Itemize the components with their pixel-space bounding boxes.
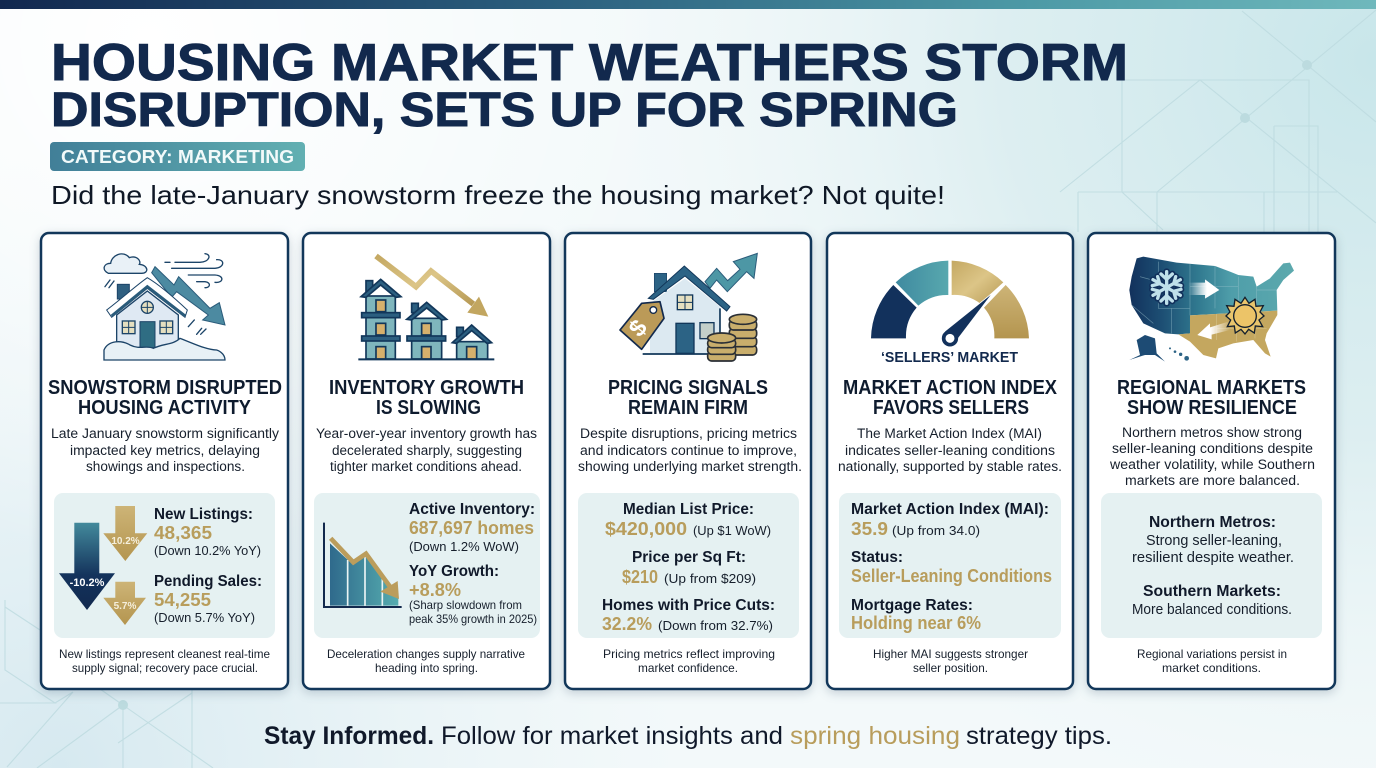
homes with price cuts stat: 32.2%	[602, 614, 652, 634]
heading: SHOW RESILIENCE	[1127, 397, 1297, 419]
pending sales stat: (Down 5.7% YoY)	[154, 610, 255, 625]
description: tighter market conditions ahead.	[330, 459, 522, 474]
description: weather volatility, while Southern	[1109, 457, 1315, 472]
price per square foot stat: (Up from $209)	[664, 571, 756, 586]
status stat	[851, 549, 1052, 586]
icon: gauge	[871, 261, 1029, 345]
footnote: New listings represent cleanest real-time	[59, 647, 270, 661]
mortgage rates stat: Mortgage Rates:	[851, 597, 973, 614]
southern markets	[1132, 583, 1292, 618]
heading	[843, 377, 1058, 419]
new listings stat: 48,365	[154, 523, 212, 543]
MAI stat: (Up from 34.0)	[892, 523, 980, 538]
icon: large down arrow	[59, 523, 115, 610]
panel: regional markets show resilience	[1088, 233, 1335, 689]
footnote: Pricing metrics reflect improving	[603, 647, 775, 661]
icon: house with price tag, arrow and coins: $	[624, 315, 653, 342]
footnote: market confidence.	[638, 661, 738, 675]
description: nationally, supported by stable rates.	[838, 459, 1062, 474]
category badge: CATEGORY: MARKETING	[61, 147, 294, 167]
description: showing underlying market strength.	[578, 459, 802, 474]
footnote	[603, 647, 775, 675]
icon: gold down arrow new listings: 10.2%	[111, 536, 140, 547]
icon: US map with snowflake and sun	[1129, 257, 1294, 362]
description: Late January snowstorm significantly	[51, 426, 279, 441]
northern metros: resilient despite weather.	[1132, 550, 1294, 566]
homes with price cuts stat: (Down from 32.7%)	[658, 618, 773, 633]
active inventory stat	[409, 501, 535, 554]
yoy growth stat: YoY Growth:	[409, 563, 499, 580]
new listings stat: (Down 10.2% YoY)	[154, 543, 261, 558]
median list price stat	[605, 501, 771, 539]
footnote	[327, 647, 525, 675]
description: impacted key metrics, delaying	[70, 443, 260, 458]
icon: large down arrow: -10.2%	[70, 577, 105, 589]
new listings stat	[154, 506, 261, 558]
active inventory stat: (Down 1.2% WoW)	[409, 539, 519, 554]
median list price stat: $420,000	[605, 519, 687, 539]
subtitle: Did the late-January snowstorm freeze the housing market? Not quite!	[51, 180, 945, 210]
northern metros: Northern Metros:	[1149, 514, 1276, 531]
homes with price cuts stat: Homes with Price Cuts:	[602, 597, 775, 614]
description	[838, 426, 1062, 474]
icon: snow-covered house with falling arrow	[104, 254, 225, 360]
icon: shrinking houses with falling arrow	[358, 256, 494, 359]
description	[1109, 425, 1315, 488]
footnote: Deceleration changes supply narrative	[327, 647, 525, 661]
metrics box	[314, 493, 540, 638]
metrics box	[578, 493, 799, 638]
heading: INVENTORY GROWTH	[329, 377, 524, 399]
call to action: Follow for market insights and	[441, 722, 783, 750]
footnote: Regional variations persist in	[1137, 647, 1287, 661]
footnote: market conditions.	[1162, 661, 1261, 675]
footnote: heading into spring.	[375, 661, 478, 675]
category badge	[50, 142, 305, 171]
icon: gold down arrow pending sales: 5.7%	[114, 601, 137, 612]
description: seller-leaning conditions despite	[1112, 441, 1313, 456]
pending sales stat	[154, 573, 262, 625]
mortgage rates stat	[851, 597, 981, 633]
footnote	[1137, 647, 1287, 675]
yoy growth stat: (Sharp slowdown from	[409, 598, 522, 612]
description: Northern metros show strong	[1122, 425, 1302, 440]
pending sales stat: 54,255	[154, 590, 211, 610]
description: markets are more balanced.	[1125, 473, 1300, 488]
heading: FAVORS SELLERS	[873, 397, 1029, 419]
heading: REGIONAL MARKETS	[1117, 377, 1306, 399]
yoy growth stat	[409, 563, 537, 626]
footnote	[59, 647, 270, 675]
MAI stat	[851, 501, 1049, 539]
top gradient bar	[0, 0, 1376, 9]
heading	[329, 377, 524, 419]
title: HOUSING MARKET WEATHERS STORM	[51, 34, 1128, 92]
description: and indicators continue to improve,	[580, 443, 797, 458]
median list price stat: Median List Price:	[623, 501, 754, 518]
icon: gold down arrow pending sales	[103, 582, 146, 625]
description	[316, 426, 537, 474]
footnote: Higher MAI suggests stronger	[873, 647, 1028, 661]
MAI stat: 35.9	[851, 519, 888, 539]
MAI stat: Market Action Index (MAI):	[851, 501, 1049, 518]
metrics box	[1101, 493, 1322, 638]
metrics box	[839, 493, 1061, 638]
yoy growth stat: +8.8%	[409, 580, 461, 600]
mortgage rates stat: Holding near 6%	[851, 613, 981, 633]
heading	[48, 377, 282, 419]
active inventory stat: Active Inventory:	[409, 501, 535, 518]
description: Despite disruptions, pricing metrics	[580, 426, 797, 441]
status stat: Seller-Leaning Conditions	[851, 566, 1052, 586]
gauge label: ‘SELLERS’ MARKET	[881, 349, 1018, 366]
description: indicates seller-leaning conditions	[845, 443, 1055, 458]
footnote	[873, 647, 1028, 675]
price per square foot stat: $210	[622, 567, 658, 587]
price per square foot stat	[622, 549, 756, 587]
description: decelerated sharply, suggesting	[332, 443, 522, 458]
median list price stat: (Up $1 WoW)	[693, 523, 771, 538]
description: showings and inspections.	[86, 459, 245, 474]
pending sales stat: Pending Sales:	[154, 573, 262, 590]
status stat: Status:	[851, 549, 903, 566]
chart: declining inventory	[324, 523, 402, 607]
call to action: spring housing	[790, 722, 960, 750]
southern markets: Southern Markets:	[1143, 583, 1281, 600]
active inventory stat: 687,697 homes	[409, 518, 534, 538]
call to action	[264, 722, 1112, 750]
new listings stat: New Listings:	[154, 506, 253, 523]
description: The Market Action Index (MAI)	[857, 426, 1042, 441]
metrics box	[54, 493, 275, 638]
icon: gold down arrow new listings	[103, 506, 147, 561]
heading: SNOWSTORM DISRUPTED	[48, 377, 282, 399]
description	[51, 426, 279, 474]
title: DISRUPTION, SETS UP FOR SPRING	[51, 84, 958, 137]
call to action: strategy tips.	[966, 722, 1112, 750]
southern markets: More balanced conditions.	[1132, 602, 1292, 618]
footnote: supply signal; recovery pace crucial.	[72, 661, 258, 675]
northern metros: Strong seller-leaning,	[1146, 533, 1282, 549]
footnote: seller position.	[913, 661, 988, 675]
heading: IS SLOWING	[376, 397, 481, 419]
heading	[1117, 377, 1306, 419]
panel: snowstorm disrupted housing activity	[41, 233, 288, 689]
heading: HOUSING ACTIVITY	[78, 397, 252, 419]
description: Year-over-year inventory growth has	[316, 426, 537, 441]
heading: REMAIN FIRM	[628, 397, 748, 419]
panel: pricing signals remain firm	[565, 233, 811, 689]
description	[578, 426, 802, 474]
heading	[608, 377, 768, 419]
call to action: Stay Informed.	[264, 722, 434, 750]
heading: MARKET ACTION INDEX	[843, 377, 1058, 399]
yoy growth stat: peak 35% growth in 2025)	[409, 612, 537, 626]
homes with price cuts stat	[602, 597, 775, 634]
panel: market action index favors sellers	[827, 233, 1073, 689]
price per square foot stat: Price per Sq Ft:	[632, 549, 746, 566]
heading: PRICING SIGNALS	[608, 377, 768, 399]
panel: inventory growth is slowing	[303, 233, 550, 689]
northern metros	[1132, 514, 1294, 566]
icon: house with price tag, arrow and coins	[620, 253, 757, 361]
title	[51, 34, 1128, 137]
